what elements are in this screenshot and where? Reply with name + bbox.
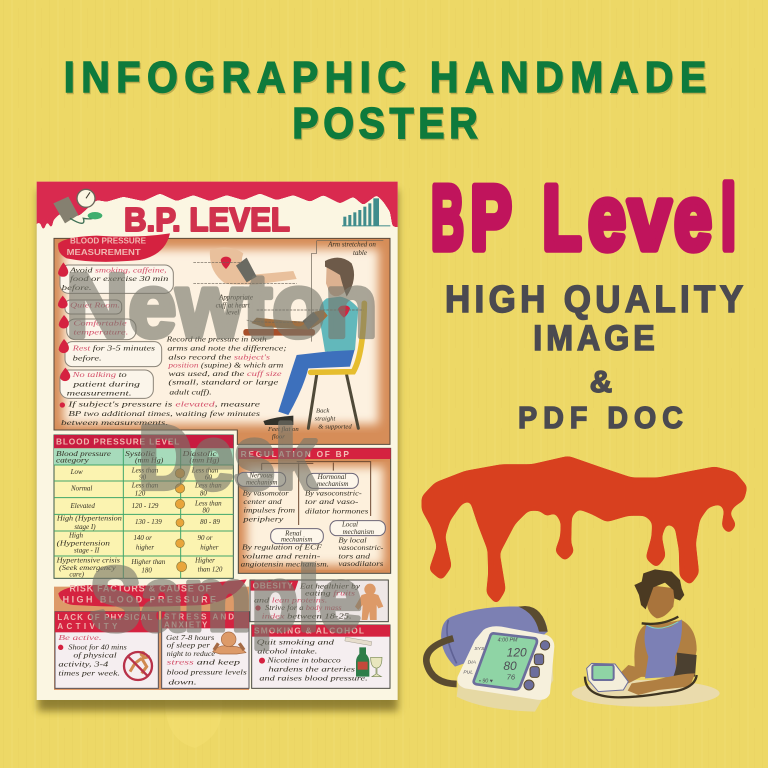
illustration: dripping blood bbox=[422, 456, 747, 605]
panel: blood pressure level table: BLOOD PRESSURE LEVEL bbox=[56, 436, 179, 446]
mechanism descriptions: tor and vaso- bbox=[305, 497, 359, 506]
heading: BP Level: L bbox=[543, 167, 581, 269]
text block: high quality image and pdf doc bbox=[445, 278, 743, 435]
note: record the pressure: also record the subject's bbox=[168, 352, 270, 361]
table bbox=[243, 329, 315, 336]
mechanism titles: Hormonal bbox=[317, 473, 346, 481]
mechanism descriptions: angiotensin mechanism. bbox=[241, 560, 329, 569]
card: obesity bbox=[250, 580, 388, 622]
title: POSTER bbox=[293, 100, 479, 149]
mechanism descriptions: volume and renin- bbox=[242, 551, 321, 560]
panel: regulation of BP bbox=[237, 448, 391, 573]
label: back straight: straight bbox=[315, 415, 336, 422]
card: lack of physical activity: of physical bbox=[73, 651, 117, 660]
note: record the pressure: arms and note the difference; bbox=[167, 344, 287, 353]
torso bbox=[319, 297, 358, 352]
heading: B.P. LEVEL: B.P. LEVEL bbox=[124, 202, 290, 239]
card: smoking and alcohol bbox=[252, 625, 390, 688]
table category column: High (Hypertension bbox=[56, 515, 122, 523]
table category column bbox=[55, 468, 122, 579]
table systolic column: 90 bbox=[139, 474, 147, 482]
mechanism descriptions: By local bbox=[338, 535, 367, 544]
label: arm stretched: Arm stretched on bbox=[327, 241, 376, 249]
note: record the pressure: adult cuff). bbox=[169, 387, 212, 396]
table and-or badges bbox=[175, 469, 187, 572]
card: stress and anxiety: blood pressure levels bbox=[167, 668, 247, 677]
list text: No talking to bbox=[71, 370, 127, 379]
label: feet flat bbox=[267, 426, 299, 440]
list text: Rest for 3-5 minutes bbox=[71, 344, 155, 353]
chair bbox=[308, 303, 364, 428]
heading: BP Level: B bbox=[431, 168, 464, 269]
list text bbox=[62, 266, 169, 398]
mechanism titles: Nervous bbox=[248, 472, 273, 480]
monitor readings bbox=[463, 637, 527, 685]
table category column: High bbox=[68, 531, 83, 539]
icon: cigarette, bottle and glass bbox=[345, 637, 382, 677]
monitor body bbox=[457, 626, 554, 712]
label: back straight: & supported bbox=[318, 423, 352, 430]
illustration: seated person bbox=[243, 258, 364, 428]
icon: body figure bbox=[355, 584, 383, 620]
card: smoking and alcohol: alcohol intake. bbox=[257, 646, 318, 655]
mechanism descriptions: By vasomotor bbox=[243, 488, 289, 497]
table diastolic column: Higher bbox=[194, 557, 215, 565]
monitor readings: PUL bbox=[463, 669, 473, 675]
table systolic column: Higher than bbox=[130, 558, 166, 566]
list pills bbox=[60, 265, 173, 398]
icon: gauge and cuff bbox=[53, 189, 102, 223]
mechanism titles: mechanism bbox=[281, 536, 312, 544]
mechanism titles: mechanism bbox=[246, 478, 277, 486]
text block: high quality image and pdf doc: IMAGE bbox=[533, 320, 655, 358]
panel: risk factors and cause of high blood pressure: HIGH BLOOD PRESSURE bbox=[63, 595, 216, 605]
title: POSTER bbox=[292, 98, 478, 147]
monitor readings: • 90 ♥ bbox=[479, 679, 493, 685]
label: feet flat: Feet flat on bbox=[267, 426, 299, 433]
table header text: (mm Hg) bbox=[135, 457, 164, 465]
heading: BP Level: e bbox=[674, 167, 712, 268]
table header text: (mm Hg) bbox=[189, 457, 220, 465]
note: record the pressure bbox=[165, 335, 287, 396]
card: stress and anxiety: Get 7-8 hours bbox=[166, 633, 214, 642]
cuff bbox=[426, 606, 548, 684]
card: lack of physical activity: LACK OF PHYSICAL bbox=[57, 613, 152, 622]
card: obesity: index between 18-25. bbox=[262, 611, 352, 620]
table diastolic column: higher bbox=[200, 543, 219, 551]
table diastolic column: Less than bbox=[191, 466, 219, 474]
monitor readings: DIA bbox=[468, 659, 477, 665]
panel: blood pressure level table bbox=[54, 435, 233, 579]
label: appropriate cuff level bbox=[216, 293, 253, 316]
table diastolic column: 80 - 89 bbox=[200, 518, 220, 526]
note: elevated pressure bbox=[61, 400, 261, 427]
mechanism titles: Renal bbox=[284, 529, 302, 537]
table category column: Normal bbox=[70, 485, 92, 493]
table category column: (Seek emergency bbox=[59, 564, 117, 572]
text block: high quality image and pdf doc: PDF DOC bbox=[518, 401, 683, 435]
table header text: Systolic bbox=[125, 450, 156, 458]
table category column: stage - II bbox=[74, 547, 100, 555]
card: stress and anxiety: of sleep per bbox=[167, 640, 210, 649]
list text: Comfortable bbox=[73, 319, 127, 328]
monitor readings: 76 bbox=[507, 672, 516, 681]
panel: risk factors and cause of high blood pressure bbox=[54, 579, 390, 690]
mechanism descriptions bbox=[241, 488, 384, 569]
head and hair bbox=[647, 585, 676, 618]
table category column: (Hypertension bbox=[57, 540, 111, 548]
monitor readings: 4:00 PM bbox=[498, 637, 518, 643]
mechanism descriptions: By regulation of ECF bbox=[242, 542, 323, 551]
card: stress and anxiety bbox=[162, 612, 249, 688]
legs bbox=[278, 348, 355, 415]
table systolic column: 140 or bbox=[133, 534, 152, 542]
mechanism titles bbox=[246, 472, 374, 544]
table diastolic column bbox=[191, 466, 223, 573]
table diastolic column: 60 bbox=[205, 474, 212, 482]
table systolic column: higher bbox=[136, 543, 154, 551]
poster shadow bbox=[38, 190, 398, 711]
illustration: blood pressure monitor bbox=[426, 606, 554, 712]
card: obesity: and lean proteins. bbox=[254, 596, 328, 605]
label: appropriate cuff level: cuff at heart bbox=[216, 302, 251, 310]
table category column: Hypertensive crisis bbox=[55, 557, 120, 565]
label: feet flat: floor bbox=[272, 433, 285, 440]
card: stress and anxiety: stress and keep bbox=[167, 658, 241, 667]
note: elevated pressure: If subject's pressure is elevated , measure bbox=[67, 400, 261, 409]
heading: BP Level: e bbox=[588, 167, 626, 268]
card: obesity: eating fruits bbox=[305, 589, 355, 598]
mechanism descriptions: vasoconstric- bbox=[338, 543, 384, 552]
watermark: Newton Desk Sample: Sample bbox=[90, 550, 362, 650]
list text: Quiet Room. bbox=[70, 301, 120, 310]
text block: high quality image and pdf doc: & bbox=[590, 364, 612, 399]
card: lack of physical activity: times per week. bbox=[58, 668, 120, 677]
note: record the pressure: position (supine) & which arm bbox=[167, 361, 284, 370]
mechanism descriptions: impulses from bbox=[243, 505, 295, 514]
arm bbox=[251, 310, 328, 330]
panel: handmade BP level poster bbox=[27, 172, 408, 700]
label: appropriate cuff level: level bbox=[226, 308, 239, 316]
ribbon heading bbox=[58, 233, 170, 262]
table systolic column: 130 - 139 bbox=[135, 518, 162, 526]
text block: high quality image and pdf doc: HIGH QUALITY bbox=[445, 278, 743, 320]
watermark: Newton Desk Sample: Newton bbox=[66, 257, 378, 357]
panel: risk factors and cause of high blood pressure: RISK FACTORS & CAUSE OF bbox=[69, 584, 211, 594]
table category column: Low bbox=[70, 468, 83, 476]
icon: stressed head bbox=[213, 632, 246, 654]
table header text: category bbox=[56, 457, 90, 465]
mat bbox=[572, 680, 720, 707]
small monitor bbox=[587, 663, 628, 692]
list text: temperature. bbox=[73, 327, 128, 336]
mechanism pills bbox=[237, 472, 385, 544]
heading: BP Level bbox=[431, 167, 736, 269]
monitor readings: 80 bbox=[503, 659, 517, 673]
head bbox=[326, 265, 347, 296]
heading: BP Level: P bbox=[470, 168, 512, 269]
table diastolic column: 80 bbox=[200, 489, 207, 497]
card: lack of physical activity: ACTIVITY bbox=[57, 622, 118, 631]
mechanism descriptions: periphery bbox=[242, 514, 284, 523]
title bbox=[64, 52, 707, 149]
table systolic column: Less than bbox=[131, 466, 159, 474]
list text: before. bbox=[73, 354, 102, 363]
header band with drips bbox=[36, 182, 398, 228]
mechanism descriptions: tors and bbox=[338, 551, 370, 560]
card: stress and anxiety: ANXIETY bbox=[164, 621, 208, 630]
monitor readings: SYS bbox=[474, 646, 485, 652]
list text: measurement. bbox=[67, 389, 132, 398]
table diastolic column: Less than bbox=[194, 499, 222, 507]
note: record the pressure: (small, standard or large bbox=[168, 377, 279, 386]
monitor readings: 120 bbox=[507, 646, 527, 660]
icon: rising bars bbox=[342, 198, 390, 226]
label: back straight: Back bbox=[316, 407, 330, 414]
card: obesity: Eat healthier by bbox=[299, 581, 361, 590]
table diastolic column: 80 bbox=[203, 507, 210, 515]
card: obesity: OBESITY bbox=[253, 581, 293, 591]
list text: patient during bbox=[72, 379, 140, 388]
note: record the pressure: Record the pressure in both bbox=[165, 335, 267, 344]
mechanism titles: mechanism bbox=[317, 480, 348, 488]
card: smoking and alcohol: and raises blood pressure. bbox=[259, 674, 368, 683]
table diastolic column: than 120 bbox=[198, 565, 223, 573]
label: appropriate cuff level: Appropriate bbox=[218, 293, 253, 301]
table systolic column: 120 bbox=[135, 489, 146, 497]
icon: no running bbox=[124, 651, 152, 680]
mechanism descriptions: vasodilators bbox=[338, 559, 383, 568]
panel: regulation of BP: REGULATION OF BP bbox=[241, 449, 349, 459]
mechanism descriptions: center and bbox=[243, 497, 282, 506]
panel: blood pressure measurement bbox=[54, 233, 390, 444]
table systolic column bbox=[130, 466, 166, 575]
list text: food or exercise 30 min bbox=[70, 274, 169, 283]
card: smoking and alcohol: Nicotine in tobacco bbox=[266, 656, 341, 665]
illustration: person measuring blood pressure bbox=[572, 569, 720, 707]
mechanism descriptions: dilator hormones bbox=[305, 506, 368, 515]
heading: BP Level: v bbox=[628, 167, 671, 268]
table category column: Elevated bbox=[69, 502, 95, 510]
table header text bbox=[56, 450, 220, 465]
heading: BP Level: l bbox=[721, 167, 736, 268]
watermark: Newton Desk Sample bbox=[66, 257, 378, 650]
table systolic column: 120 - 129 bbox=[132, 502, 159, 510]
mechanism titles: Local bbox=[341, 521, 358, 529]
note: elevated pressure: between measurements. bbox=[61, 418, 168, 427]
card: obesity: Strive for a body mass bbox=[265, 603, 342, 612]
card: lack of physical activity: Shoot for 40 mins bbox=[68, 642, 127, 651]
mechanism titles: mechanism bbox=[343, 528, 374, 536]
card: smoking and alcohol: hardens the arteries bbox=[268, 664, 355, 673]
title: INFOGRAPHIC HANDMADE bbox=[64, 52, 706, 101]
arm cuff bbox=[673, 653, 697, 677]
list text: Avoid smoking, caffeine, bbox=[69, 266, 167, 275]
ribbon heading: BLOOD PRESSURE bbox=[70, 236, 146, 246]
table category column: stage I) bbox=[74, 523, 96, 531]
list bullets bbox=[58, 262, 70, 408]
mechanism descriptions: By vasoconstric- bbox=[305, 488, 362, 497]
title: INFOGRAPHIC HANDMADE bbox=[65, 54, 707, 103]
poster artwork canvas bbox=[33, 60, 747, 717]
illustration: arm with cuff bbox=[193, 247, 297, 285]
card: lack of physical activity: activity, 3-4 bbox=[58, 659, 109, 668]
card: lack of physical activity: Be active. bbox=[58, 633, 102, 642]
table diastolic column: Less than bbox=[194, 481, 222, 489]
card: stress and anxiety: STRESS AND bbox=[164, 612, 234, 621]
card: smoking and alcohol: Quit smoking and bbox=[257, 638, 334, 647]
note: record the pressure: was used, and the cuff size bbox=[168, 369, 282, 378]
card: smoking and alcohol: SMOKING & ALCOHOL bbox=[254, 626, 364, 636]
list text: before. bbox=[62, 283, 92, 292]
card: stress and anxiety: night to reduce bbox=[167, 649, 216, 658]
forearm and cable bbox=[628, 673, 695, 695]
table diastolic column: 90 or bbox=[198, 534, 213, 542]
watermark: Newton Desk Sample: Desk bbox=[138, 408, 317, 508]
table header text: Diastolic bbox=[181, 450, 218, 458]
torso bbox=[634, 620, 697, 678]
note: elevated pressure: BP two additional times, waiting few minutes bbox=[68, 409, 260, 418]
table header text: Blood pressure bbox=[56, 450, 111, 458]
table systolic column: Less than bbox=[131, 481, 159, 489]
table systolic column: 180 bbox=[141, 567, 152, 575]
label: back straight bbox=[315, 407, 352, 430]
card: stress and anxiety: down. bbox=[168, 678, 197, 687]
card: lack of physical activity bbox=[55, 612, 158, 688]
label: arm stretched: table bbox=[353, 249, 367, 257]
ribbon heading: MEASUREMENT bbox=[67, 247, 141, 257]
monitor buttons bbox=[524, 641, 550, 690]
label: arm stretched bbox=[312, 241, 383, 342]
table category column: care) bbox=[69, 571, 85, 579]
